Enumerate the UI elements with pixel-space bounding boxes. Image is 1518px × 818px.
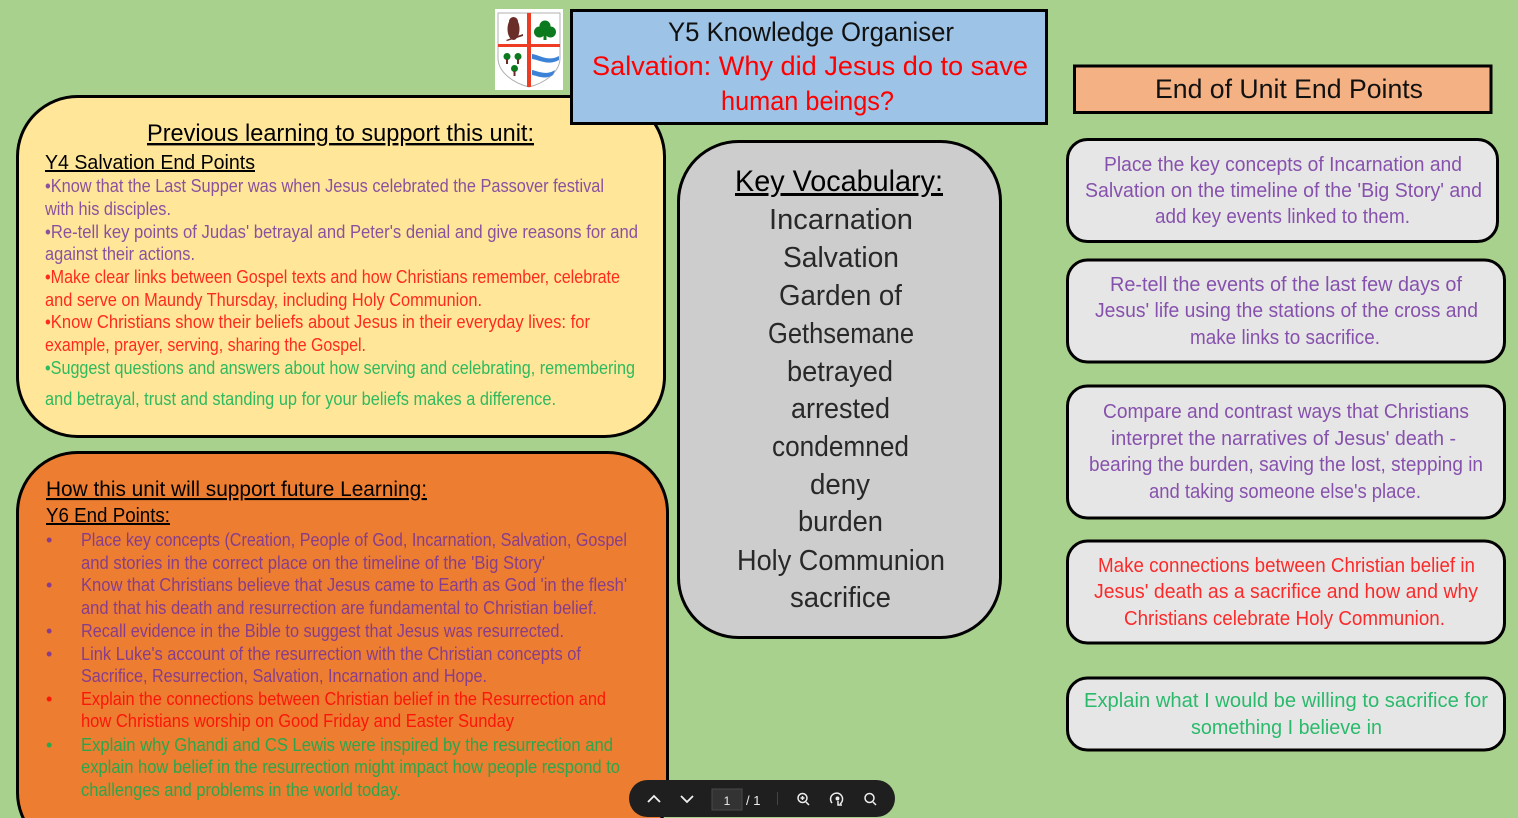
end point box 4: Jesus' death as a sacrifice and how and why: [1094, 581, 1478, 603]
text block: purple Y4 points: •Re-tell key points of Judas' betrayal and Peter's denial and give reasons for and: [45, 222, 638, 242]
end point box 2: Re-tell the events of the last few days of: [1110, 274, 1462, 296]
vocabulary list: deny: [810, 469, 870, 501]
icon: next page: [681, 796, 693, 802]
end point box 4: Christians celebrate Holy Communion.: [1124, 608, 1445, 630]
end point box 4: [1068, 541, 1504, 643]
icon: rotate: [831, 793, 843, 805]
text block: purple Y6 points: [46, 530, 627, 686]
end point box 5: [1068, 678, 1504, 750]
vocabulary list: sacrifice: [790, 582, 891, 614]
vocabulary list: Incarnation: [769, 204, 913, 236]
title box: [572, 10, 1046, 124]
vocabulary list: arrested: [791, 393, 890, 425]
text block: purple Y6 points: •: [46, 530, 52, 550]
text block: red Y6 points: how Christians worship on Good Friday and Easter Sunday: [81, 711, 514, 731]
text block: red Y6 points: [46, 689, 606, 731]
text block: red Y6 points: •: [46, 689, 52, 709]
end point box 1: [1068, 140, 1498, 242]
text block: purple Y4 points: [44, 176, 638, 264]
text block: purple Y4 points: •Know that the Last Supper was when Jesus celebrated the Passover festival: [45, 176, 604, 196]
text block: purple Y6 points: •: [46, 644, 52, 664]
end point box 2: [1068, 260, 1504, 362]
PDF viewer toolbar: [629, 780, 895, 817]
end point box 3: and taking someone else's place.: [1149, 481, 1421, 503]
page number: [712, 789, 760, 810]
end point box 3: bearing the burden, saving the lost, stepping in: [1089, 454, 1483, 476]
text block: green Y6 points: challenges and problems in the world today.: [81, 780, 401, 800]
heading: end of unit end points: End of Unit End Points: [1155, 74, 1423, 104]
text block: green Y6 points: explain how belief in the resurrection might impact how people respond to: [81, 757, 620, 777]
end point box 2: make links to sacrifice.: [1190, 327, 1380, 349]
end point box 3: interpret the narratives of Jesus' death -: [1111, 428, 1456, 450]
text block: green Y6 points: Explain why Ghandi and CS Lewis were inspired by the resurrection and: [81, 735, 613, 755]
end point box 5: something I believe in: [1191, 717, 1382, 739]
vocabulary list: Holy Communion: [737, 545, 945, 577]
end point box 1: add key events linked to them.: [1155, 206, 1410, 228]
text block: purple Y6 points: •: [46, 621, 52, 641]
page number: / 1: [746, 793, 760, 808]
end point box 1: Place the key concepts of Incarnation and: [1104, 154, 1462, 176]
subtitle: human beings?: [721, 86, 894, 116]
text block: purple Y6 points: Sacrifice, Resurrection, Salvation, Incarnation and Hope.: [81, 666, 487, 686]
end point box 5: Explain what I would be willing to sacrifice for: [1084, 690, 1488, 712]
subheading: Y4 end points: Y4 Salvation End Points: [45, 152, 255, 174]
text block: red Y4 points: •Know Christians show their beliefs about Jesus in their everyday lives: for: [45, 312, 590, 332]
icon: school crest: [495, 9, 563, 90]
panel: key vocabulary: [678, 142, 1000, 638]
subheading: Y6 end points: Y6 End Points:: [46, 505, 170, 527]
text block: purple Y4 points: with his disciples.: [44, 199, 171, 219]
text block: purple Y6 points: Recall evidence in the Bible to suggest that Jesus was resurrected.: [81, 621, 564, 641]
vocabulary list: betrayed: [787, 356, 893, 388]
end point box 3: [1068, 386, 1504, 518]
panel: previous learning: [18, 96, 664, 436]
text block: purple Y6 points: and stories in the correct place on the timeline of the 'Big Story': [81, 553, 545, 573]
text block: green Y4 points: and betrayal, trust and standing up for your beliefs makes a difference.: [45, 389, 556, 409]
text block: purple Y6 points: Know that Christians believe that Jesus came to Earth as God 'in the flesh': [81, 575, 627, 595]
text block: red Y4 points: •Make clear links between Gospel texts and how Christians remember, celebrate: [45, 267, 620, 287]
icon: previous page: [648, 796, 660, 802]
end point box 1: Salvation on the timeline of the 'Big Story' and: [1085, 180, 1482, 202]
text block: purple Y4 points: against their actions.: [45, 244, 195, 264]
heading: end of unit end points: [1074, 66, 1491, 112]
heading: previous learning: Previous learning to support this unit:: [147, 120, 534, 147]
vocabulary list: Gethsemane: [768, 318, 914, 350]
title line: Y5 Knowledge Organiser: [668, 17, 954, 47]
text block: purple Y6 points: •: [46, 575, 52, 595]
heading: future learning: How this unit will support future Learning:: [46, 478, 427, 501]
icon: search: [865, 794, 876, 805]
text block: purple Y6 points: Place key concepts (Creation, People of God, Incarnation, Salvation, Gospel: [81, 530, 627, 550]
text block: green Y6 points: [46, 735, 620, 800]
text block: purple Y6 points: and that his death and resurrection are fundamental to Christian belief.: [81, 598, 597, 618]
panel: future learning: [18, 452, 668, 818]
vocabulary list: [737, 204, 945, 614]
text block: red Y6 points: Explain the connections between Christian belief in the Resurrection and: [81, 689, 606, 709]
text block: red Y4 points: [45, 267, 620, 355]
text block: green Y6 points: •: [46, 735, 52, 755]
end point box 2: Jesus' life using the stations of the cross and: [1095, 300, 1478, 322]
text block: red Y4 points: and serve on Maundy Thursday, including Holy Communion.: [45, 290, 482, 310]
icon: zoom in: [798, 794, 809, 805]
text block: red Y4 points: example, prayer, serving, sharing the Gospel.: [45, 335, 366, 355]
end point box 4: Make connections between Christian belief in: [1098, 555, 1475, 577]
vocabulary list: burden: [798, 506, 883, 538]
end point box 3: Compare and contrast ways that Christians: [1103, 401, 1469, 423]
vocabulary list: Salvation: [783, 242, 899, 274]
subtitle: Salvation: Why did Jesus do to save: [592, 51, 1028, 81]
text block: green Y4 points: [45, 358, 635, 409]
page number: 1: [724, 794, 731, 808]
text block: green Y4 points: •Suggest questions and answers about how serving and celebrating, remembering: [45, 358, 635, 378]
vocabulary list: condemned: [772, 431, 909, 463]
text block: purple Y6 points: Link Luke's account of the resurrection with the Christian concepts of: [81, 644, 582, 664]
subtitle: [592, 51, 1028, 116]
vocabulary list: Garden of: [779, 280, 903, 312]
heading: key vocabulary: Key Vocabulary:: [735, 165, 943, 198]
